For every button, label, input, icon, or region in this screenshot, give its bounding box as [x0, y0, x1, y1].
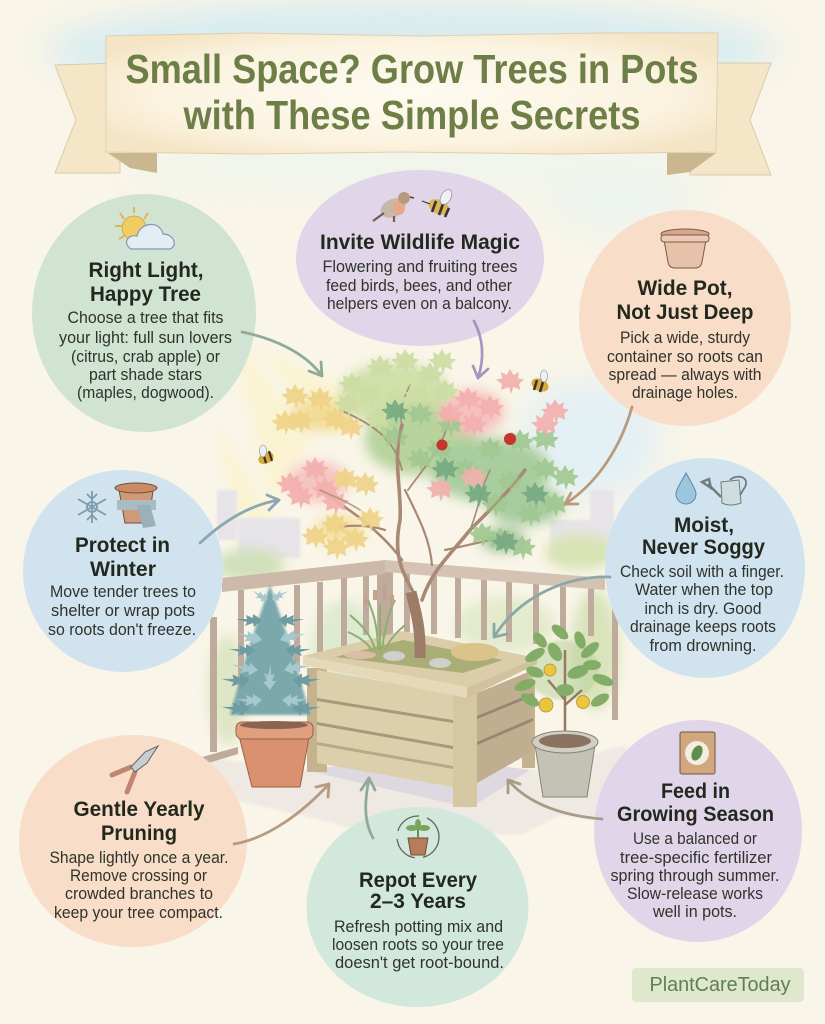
panel: feed: Slow-release works: [627, 885, 763, 903]
maple leaves: deep green: [381, 399, 549, 555]
panel: wide pot: [579, 210, 791, 426]
planter box: [303, 631, 537, 807]
panel: repot: Refresh potting mix and: [334, 918, 503, 936]
banner panel: [106, 33, 718, 154]
panel: moist never soggy: Never Soggy: [642, 535, 765, 559]
tree branches: [320, 385, 525, 600]
logo: PlantCareToday: [632, 968, 804, 1002]
panel: feed: well in pots.: [652, 903, 737, 921]
panel: gentle pruning: Gentle Yearly: [74, 797, 205, 821]
maple leaves: yellow: [271, 384, 384, 560]
title text: Small Space? Grow Trees in Pots: [126, 46, 698, 92]
arrow: feed to planter: [508, 780, 602, 819]
panel: gentle pruning: keep your tree compact.: [54, 904, 223, 922]
icon: snowflake: [78, 491, 106, 523]
panel: wildlife: Invite Wildlife Magic: [320, 230, 520, 254]
panel: right light: (maples, dogwood).: [77, 384, 214, 402]
arrow: light to tree: [242, 332, 322, 376]
panel: repot: loosen roots so your tree: [332, 936, 504, 954]
icon: repot cycle: [397, 816, 439, 858]
lemon tree in grey pot: [513, 622, 615, 797]
panel: repot: Repot Every: [359, 868, 477, 892]
panel: feed: spring through summer.: [610, 867, 780, 885]
panel: moist never soggy: Moist,: [674, 513, 734, 537]
icon: pruners: [112, 746, 158, 792]
arrow: wildlife to tree: [473, 321, 488, 378]
arrow: pot to planter: [565, 407, 632, 504]
panel: wide pot: drainage holes.: [632, 384, 738, 402]
panel: protect in winter: Move tender trees to: [50, 583, 196, 601]
icon: watering can: [702, 477, 746, 505]
blue spruce in terracotta pot: [221, 585, 321, 787]
panel: moist never soggy: drainage keeps roots: [630, 618, 776, 636]
panel: protect in winter: [23, 470, 223, 672]
panel: feed: Feed in: [661, 779, 730, 803]
panel: right light: Choose a tree that fits: [68, 309, 224, 327]
sun rays: [215, 330, 365, 565]
panel: right light: Right Light,: [88, 258, 204, 282]
panel: repot: doesn't get root-bound.: [335, 954, 504, 972]
distant greenery: [208, 534, 619, 745]
panel: moist never soggy: Check soil with a finger.: [620, 563, 784, 581]
logo: PlantCareToday: PlantCareToday: [650, 974, 790, 996]
panel: gentle pruning: crowded branches to: [65, 885, 213, 903]
panel: feed: tree-specific fertilizer: [620, 849, 773, 867]
maple leaves: mid green: [381, 402, 579, 560]
panel: repot: 2–3 Years: [370, 889, 466, 913]
panel: moist never soggy: Water when the top: [635, 581, 773, 599]
panel: right light: (citrus, crab apple) or: [71, 348, 221, 366]
panel: gentle pruning: [19, 735, 247, 947]
balcony floor: [205, 745, 632, 835]
panel: moist never soggy: inch is dry. Good: [644, 600, 762, 618]
panel: wide pot: container so roots can: [607, 348, 763, 366]
ladybugs: [436, 433, 516, 450]
panel: wildlife: [296, 170, 544, 346]
foliage wash: [288, 363, 563, 552]
maple leaves: pink: [276, 369, 569, 515]
maple leaves: light green: [334, 349, 459, 432]
panel: wildlife: helpers even on a balcony.: [327, 295, 512, 313]
panel: moist never soggy: from drowning.: [650, 637, 756, 655]
ribbon banner title: [55, 33, 771, 175]
panel: right light: your light: full sun lovers: [59, 329, 232, 347]
panel: wide pot: spread — always with: [608, 366, 762, 384]
icon: fertilizer bag: [680, 732, 715, 774]
panel: feed: [594, 720, 802, 942]
panel: protect in winter: Winter: [90, 557, 157, 581]
branches over foliage: [320, 425, 525, 530]
icon: bee: [422, 188, 454, 218]
bee near left branches: [256, 445, 276, 466]
panel: wildlife: feed birds, bees, and other: [326, 277, 513, 295]
arrow: pruning to planter: [234, 784, 329, 844]
arrows: [200, 321, 632, 844]
bee near tree top: [529, 370, 551, 394]
icon: pot with scarf: [115, 483, 157, 528]
panel: gentle pruning: Remove crossing or: [70, 867, 208, 885]
balcony railing: [202, 560, 618, 765]
icon: bird: [373, 192, 414, 222]
ribbon tails: [55, 63, 771, 175]
ornamental grass: [348, 585, 405, 650]
panel: right light: part shade stars: [89, 366, 202, 384]
panel: wide pot: Not Just Deep: [616, 300, 754, 324]
panel: right light: Happy Tree: [90, 282, 201, 306]
planter legs: [307, 668, 535, 772]
icon: water drop: [676, 473, 696, 504]
arrow: water to planter: [494, 577, 610, 637]
icon: sun and cloud: [115, 207, 174, 249]
panel: moist never soggy: [605, 458, 805, 678]
title text: with These Simple Secrets: [183, 92, 640, 138]
panel: gentle pruning: Shape lightly once a year.: [50, 849, 228, 867]
panel: wide pot: Pick a wide, sturdy: [620, 329, 751, 347]
icon: terracotta pot: [661, 229, 709, 268]
tree: [271, 349, 579, 600]
panel: protect in winter: Protect in: [75, 533, 170, 557]
trunk: [411, 592, 420, 658]
arrow: winter to tree: [200, 495, 279, 543]
city skyline: [217, 490, 614, 560]
panel: wildlife: Flowering and fruiting trees: [322, 258, 518, 276]
title text: [126, 46, 698, 138]
panel: right light: [32, 194, 256, 432]
arrow: repot to planter: [361, 778, 375, 838]
panel: wide pot: Wide Pot,: [638, 276, 732, 300]
panel: gentle pruning: Pruning: [101, 821, 177, 845]
panel: feed: Use a balanced or: [633, 830, 758, 848]
panel: repot: [306, 807, 528, 1007]
panel: feed: Growing Season: [617, 802, 774, 826]
panel: protect in winter: so roots don't freeze.: [48, 621, 196, 639]
panel: protect in winter: shelter or wrap pots: [51, 602, 195, 620]
